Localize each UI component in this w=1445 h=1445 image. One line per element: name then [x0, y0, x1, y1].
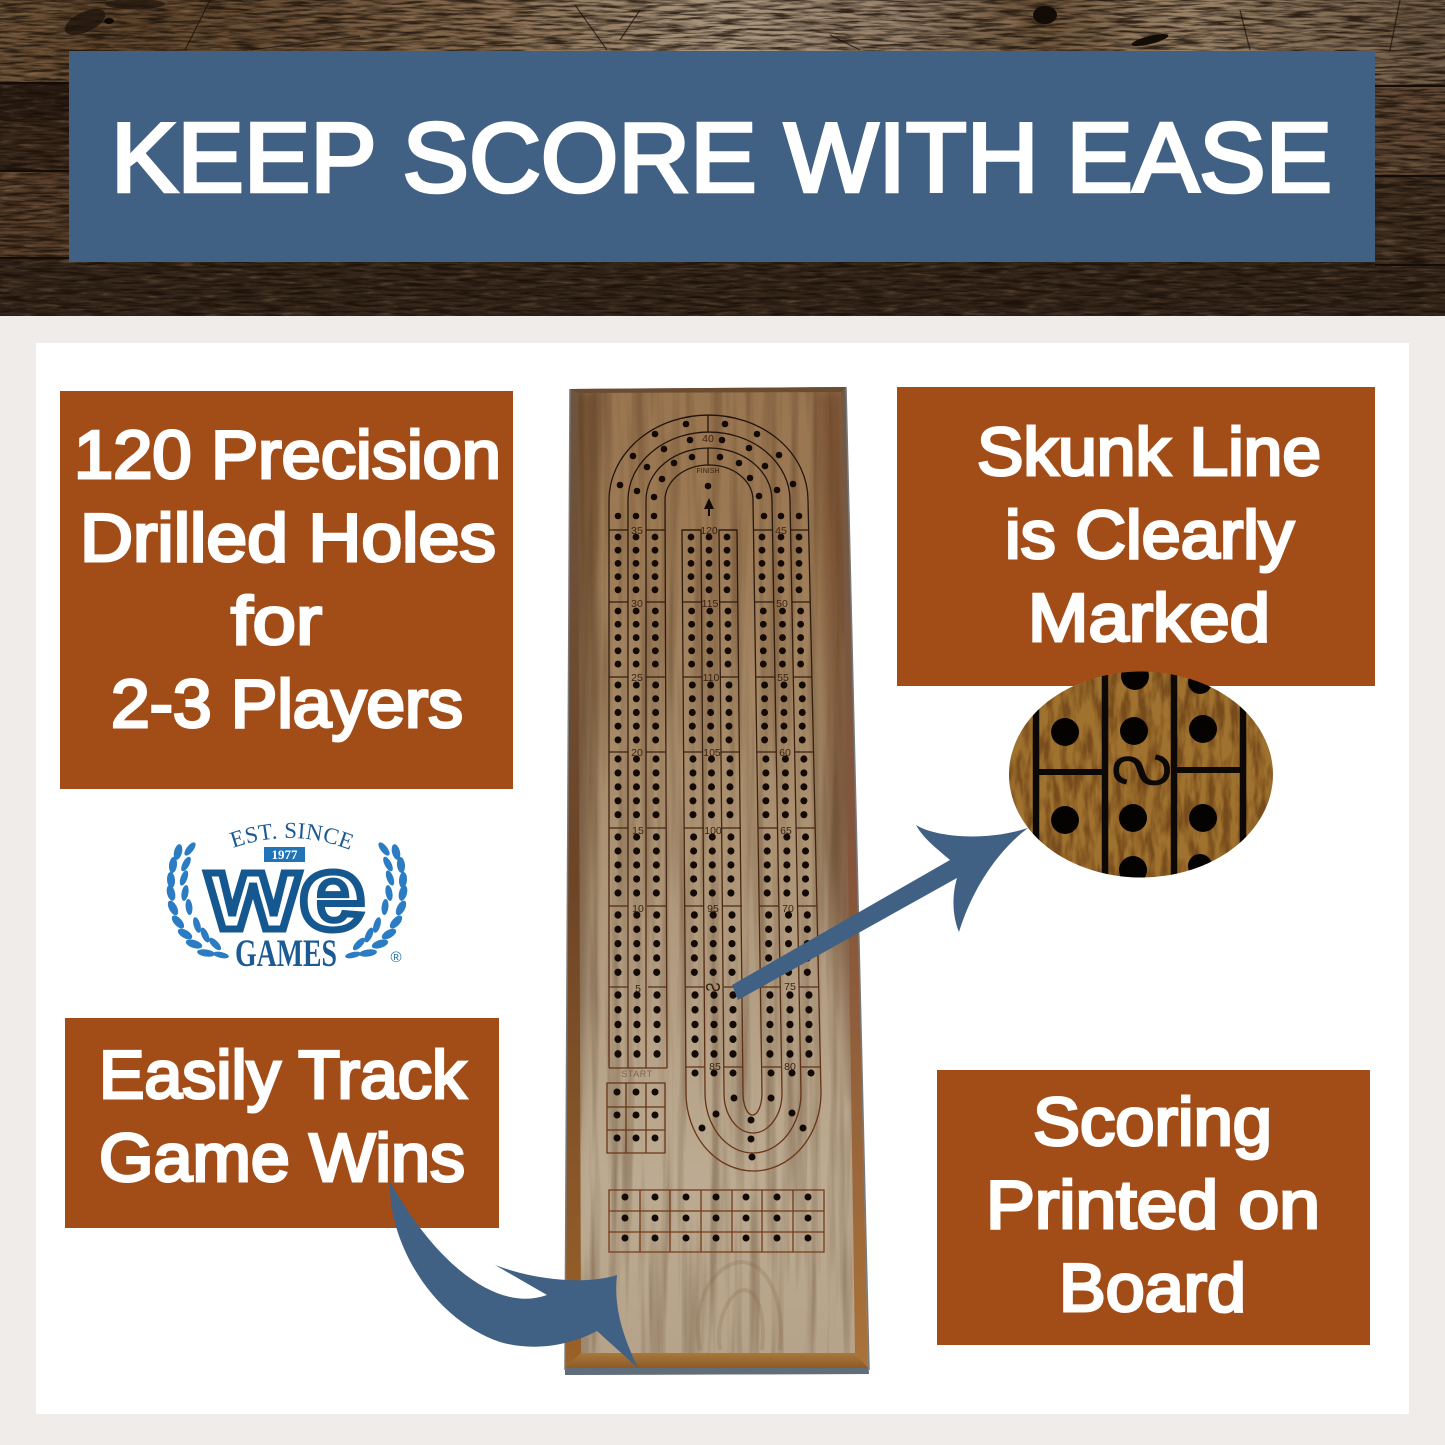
magnified skunk line lens: [1009, 672, 1273, 878]
panel: easily track game wins: Easily Track: [99, 1037, 467, 1113]
board bevels: [565, 389, 581, 1368]
panel: skunk line is clearly marked: Skunk Line: [977, 414, 1321, 490]
board score numbers: [621, 433, 796, 1079]
logo text: games: GAMES: [235, 932, 337, 975]
panel: 120 precision drilled holes: Drilled Holes: [80, 500, 496, 576]
peg holes: curves, start and game-win grid: [614, 421, 814, 1242]
board score numbers: 30: [631, 598, 643, 610]
panel: scoring printed on board: Printed on: [986, 1167, 1320, 1243]
board score numbers: 25: [631, 672, 643, 684]
header: rustic wood plank background: [0, 0, 1445, 316]
board track lines: [607, 415, 824, 1252]
board score numbers: 35: [631, 525, 643, 537]
panel: scoring printed on board: Board: [1059, 1250, 1246, 1326]
board score numbers: START: [621, 1069, 653, 1079]
board score numbers: 60: [779, 747, 791, 759]
board score numbers: 70: [782, 903, 794, 915]
board score numbers: 105: [703, 747, 721, 759]
panel: 120 precision drilled holes: 2-3 Players: [111, 666, 463, 742]
board score numbers: 85: [709, 1061, 721, 1073]
peg holes: main tracks: [618, 537, 809, 1054]
board score numbers: 95: [707, 903, 719, 915]
title text: KEEP SCORE WITH EASE: [111, 102, 1332, 212]
finish arrow: [704, 498, 714, 516]
board score numbers: 115: [702, 598, 719, 610]
board score numbers: 15: [632, 825, 644, 837]
panel: scoring printed on board: [937, 1070, 1370, 1345]
board score numbers: 75: [784, 981, 796, 993]
logo badge: 1977: 1977: [272, 847, 298, 862]
title banner: [69, 51, 1375, 262]
logo badge: 1977: [264, 847, 305, 862]
lens letter S: S: [1097, 752, 1187, 788]
panel: skunk line is clearly marked: Marked: [1028, 580, 1270, 656]
logo wordmark: we: we: [206, 834, 365, 952]
board score numbers: 20: [631, 747, 643, 759]
arrow: game wins label to game-win holes: [390, 1182, 638, 1368]
board score numbers: S: [701, 982, 725, 992]
board score numbers: 10: [632, 903, 644, 915]
board score numbers: 5: [635, 983, 641, 995]
panel: 120 precision drilled holes: for: [231, 583, 322, 659]
board score numbers: FINISH: [697, 468, 719, 475]
panel: skunk line is clearly marked: is Clearly: [1005, 497, 1294, 573]
board score numbers: 55: [777, 672, 789, 684]
logo text: est. since: EST. SINCE: [229, 822, 354, 850]
panel: easily track game wins: [65, 1018, 499, 1228]
board score numbers: 65: [780, 825, 792, 837]
board score numbers: 50: [776, 598, 788, 610]
cribbage board: [560, 380, 880, 1380]
board score numbers: 40: [702, 433, 714, 445]
logo: WE Games: [166, 822, 408, 975]
board score numbers: 80: [784, 1061, 796, 1073]
white content panel: [36, 343, 1409, 1414]
board score numbers: 100: [704, 825, 722, 837]
board score numbers: 120: [700, 525, 718, 537]
panel: 120 precision drilled holes: [60, 391, 513, 789]
panel: scoring printed on board: Scoring: [1033, 1084, 1272, 1160]
arrow: board skunk line to lens: [732, 825, 1028, 1000]
panel: easily track game wins: Game Wins: [99, 1120, 465, 1196]
logo: WE Games: ®: [390, 949, 402, 966]
panel: 120 precision drilled holes: 120 Precision: [74, 417, 501, 493]
board score numbers: 110: [703, 672, 720, 684]
board score numbers: 45: [775, 525, 787, 537]
panel: skunk line is clearly marked: [897, 387, 1375, 686]
